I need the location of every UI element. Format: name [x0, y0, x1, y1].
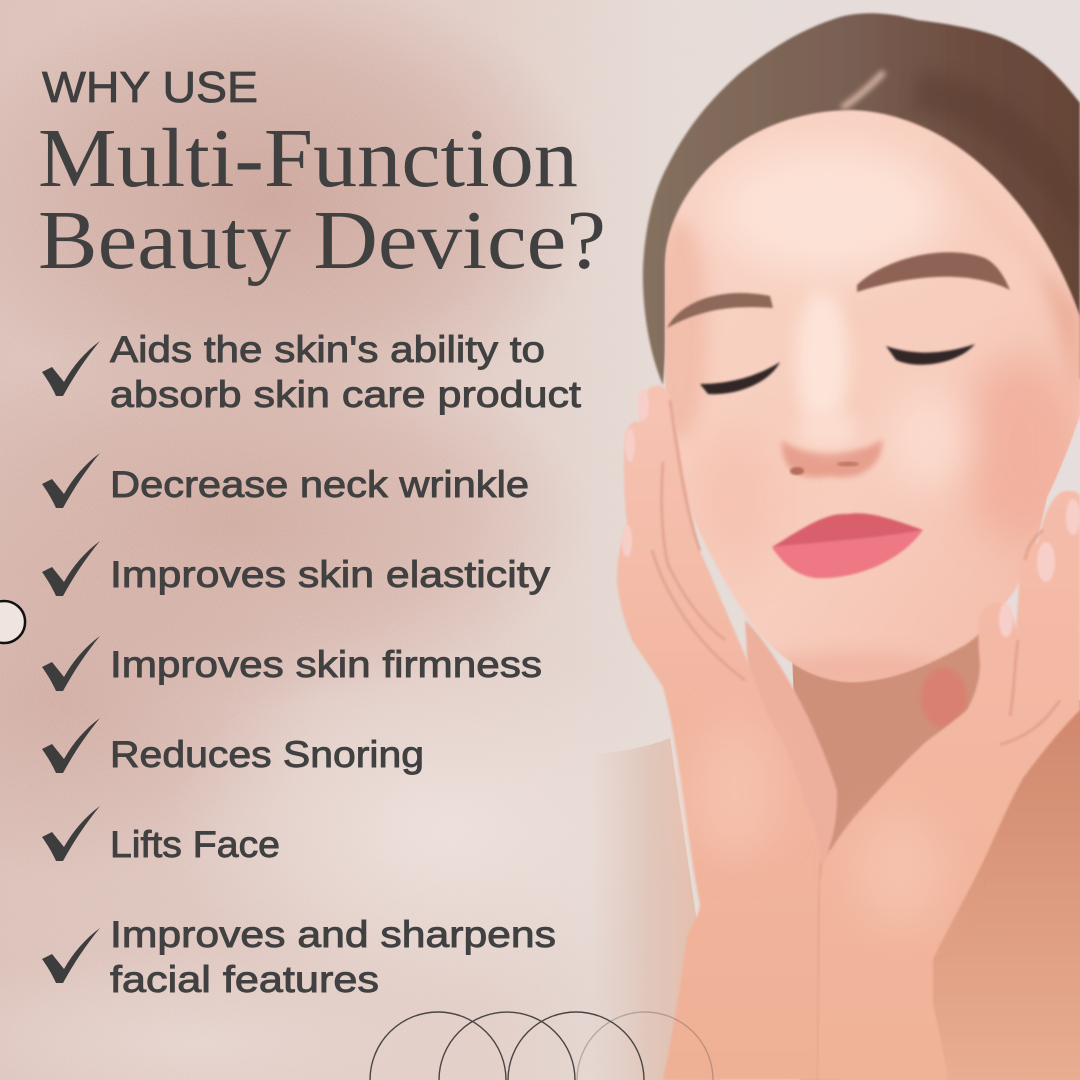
right nostril: [837, 462, 859, 466]
item 4: [42, 636, 542, 691]
left hand finger creases: [652, 400, 745, 680]
item 6: [42, 806, 280, 865]
right eyebrow: [857, 252, 1010, 292]
cheek right: [960, 355, 1080, 545]
right hairline shadow: [1038, 267, 1080, 384]
item 5: Reduces Snoring: [110, 734, 424, 775]
item 6: Lifts Face: [110, 824, 280, 865]
fingernails: [622, 389, 1080, 637]
chest right: [820, 700, 1080, 1080]
nose tip highlight: [798, 410, 858, 450]
fingertip behind neck: [921, 668, 967, 728]
item 7: [42, 914, 556, 1000]
right hand and arm: [818, 491, 1080, 1080]
right hand finger creases: [1000, 530, 1060, 745]
photo: woman with hands on face: [590, 13, 1080, 1080]
hair part: [842, 72, 884, 108]
cheek left: [692, 445, 766, 559]
seam backing between arms: [800, 850, 840, 1080]
right eye lashes: [886, 344, 975, 365]
forehead highlight: [715, 145, 945, 275]
lips: [772, 513, 923, 578]
item 5: [42, 718, 424, 775]
heading line: why use: WHY USE: [42, 63, 258, 112]
chin shade: [780, 650, 926, 681]
left palm highlight: [690, 720, 780, 860]
item 2: Decrease neck wrinkle: [110, 464, 529, 505]
item 3: Improves skin elasticity: [110, 554, 551, 595]
heading line: beauty device: Beauty Device?: [38, 194, 606, 287]
left eye lashes: [700, 362, 780, 394]
item 4: Improves skin firmness: [110, 644, 542, 685]
heading line: multi-function: Multi-Function: [38, 112, 578, 205]
right hair dark strands: [910, 70, 1080, 240]
left temple shadow: [665, 220, 711, 439]
decoration: overlapping circles at bottom: [370, 1012, 713, 1080]
neck: [790, 600, 1010, 860]
right palm highlight: [855, 815, 945, 925]
cheek bright: [890, 390, 970, 490]
face shading: [652, 140, 1080, 688]
item 1: [42, 329, 582, 415]
item 7: Improves and sharpens: [110, 914, 556, 955]
item 1: absorb skin care product: [110, 374, 582, 415]
item 3: [42, 541, 551, 596]
heading: [38, 63, 606, 287]
item 7: facial features: [110, 959, 379, 1000]
left shoulder: [590, 738, 720, 1080]
left hand and arm: [617, 386, 820, 1080]
left eyebrow: [667, 293, 773, 328]
back of left hand behind palm: [745, 620, 837, 866]
item 1: Aids the skin's ability to: [110, 329, 545, 370]
left nostril: [790, 467, 804, 475]
decoration: outlined circle at left edge: [0, 601, 25, 643]
hair: [643, 13, 1080, 385]
nose base shading: [782, 438, 882, 478]
face: [665, 110, 1080, 682]
nose bridge highlight: [796, 290, 848, 430]
checklist: [42, 329, 582, 1000]
item 2: [42, 453, 529, 508]
